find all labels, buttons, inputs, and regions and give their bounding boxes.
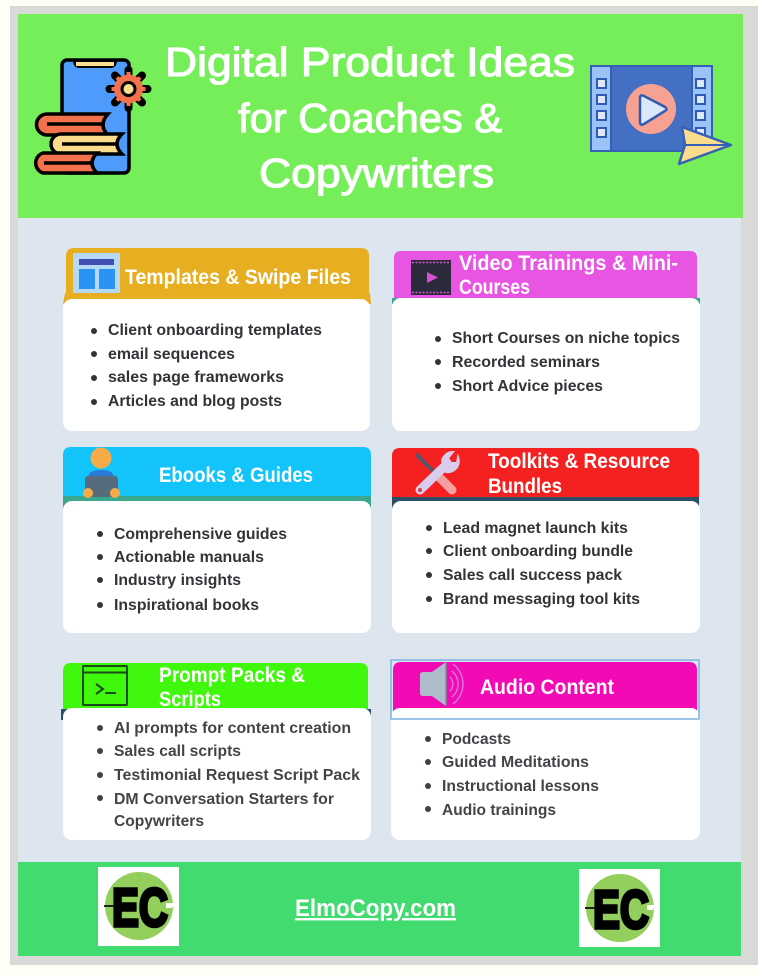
logo: right: EC — [593, 880, 649, 940]
icon: film strip — [411, 260, 451, 295]
title: for Coaches & — [238, 95, 502, 141]
list: Articles and blog posts — [108, 393, 282, 410]
panel: page body — [18, 218, 741, 862]
header banner — [18, 14, 743, 218]
panel: audio content — [391, 660, 700, 840]
list: Audio trainings — [442, 802, 556, 819]
list: sales page frameworks — [108, 369, 284, 386]
icon: speaker — [420, 662, 463, 706]
heading — [488, 450, 670, 498]
list: Comprehensive guides — [114, 526, 287, 543]
list: Actionable manuals — [114, 549, 264, 566]
icon: phone with books and gear — [36, 60, 148, 173]
title: Copywriters — [259, 150, 494, 196]
list: Lead magnet launch kits — [443, 520, 628, 537]
list: Testimonial Request Script Pack — [114, 767, 360, 784]
panel: prompt packs and scripts — [61, 663, 371, 840]
list: Inspirational books — [114, 597, 259, 614]
list: AI prompts for content creation — [114, 720, 351, 737]
panel: ebooks and guides — [63, 447, 371, 633]
logo: left: EC — [112, 878, 168, 938]
list: Sales call success pack — [443, 567, 622, 584]
panel: video trainings and mini-courses — [392, 251, 700, 431]
logo: right — [579, 869, 660, 947]
list: Client onboarding bundle — [443, 543, 633, 560]
panel: templates and swipe files — [63, 248, 371, 431]
heading: Video Trainings & Mini- — [459, 252, 678, 275]
title: Digital Product Ideas — [165, 39, 575, 85]
list: Short Advice pieces — [452, 378, 603, 395]
list — [426, 520, 640, 608]
panel: toolkits and resource bundles — [392, 448, 700, 633]
list — [435, 330, 680, 395]
heading: Audio Content — [480, 676, 614, 699]
heading: Toolkits & Resource — [488, 450, 670, 473]
list: Brand messaging tool kits — [443, 591, 640, 608]
list — [97, 526, 287, 614]
list: Client onboarding templates — [108, 322, 322, 339]
icon: layout template — [73, 253, 120, 293]
heading: Bundles — [488, 475, 562, 498]
heading: Scripts — [159, 688, 221, 711]
list: DM Conversation Starters for — [114, 791, 334, 808]
icon: person reading — [83, 448, 120, 498]
heading: Templates & Swipe Files — [125, 266, 351, 289]
footer link: ElmoCopy.com — [295, 895, 456, 922]
list: Sales call scripts — [114, 743, 241, 760]
icon: terminal window — [83, 666, 127, 705]
heading — [159, 664, 305, 711]
list: Industry insights — [114, 572, 241, 589]
heading: Ebooks & Guides — [159, 464, 313, 487]
list: Short Courses on niche topics — [452, 330, 680, 347]
list — [425, 731, 599, 819]
list: Guided Meditations — [442, 754, 589, 771]
title — [165, 39, 575, 196]
list: Recorded seminars — [452, 354, 600, 371]
list: email sequences — [108, 346, 235, 363]
logo: left — [98, 867, 179, 946]
icon: wrench and screwdriver — [417, 452, 459, 492]
list — [97, 720, 360, 830]
list: Instructional lessons — [442, 778, 599, 795]
list — [91, 322, 322, 410]
heading: Prompt Packs & — [159, 664, 305, 687]
heading: Courses — [459, 276, 530, 299]
heading — [459, 252, 678, 299]
footer band — [18, 862, 741, 956]
list: Podcasts — [442, 731, 511, 748]
list: Copywriters — [114, 813, 204, 830]
icon: video film with paper plane — [591, 66, 731, 164]
